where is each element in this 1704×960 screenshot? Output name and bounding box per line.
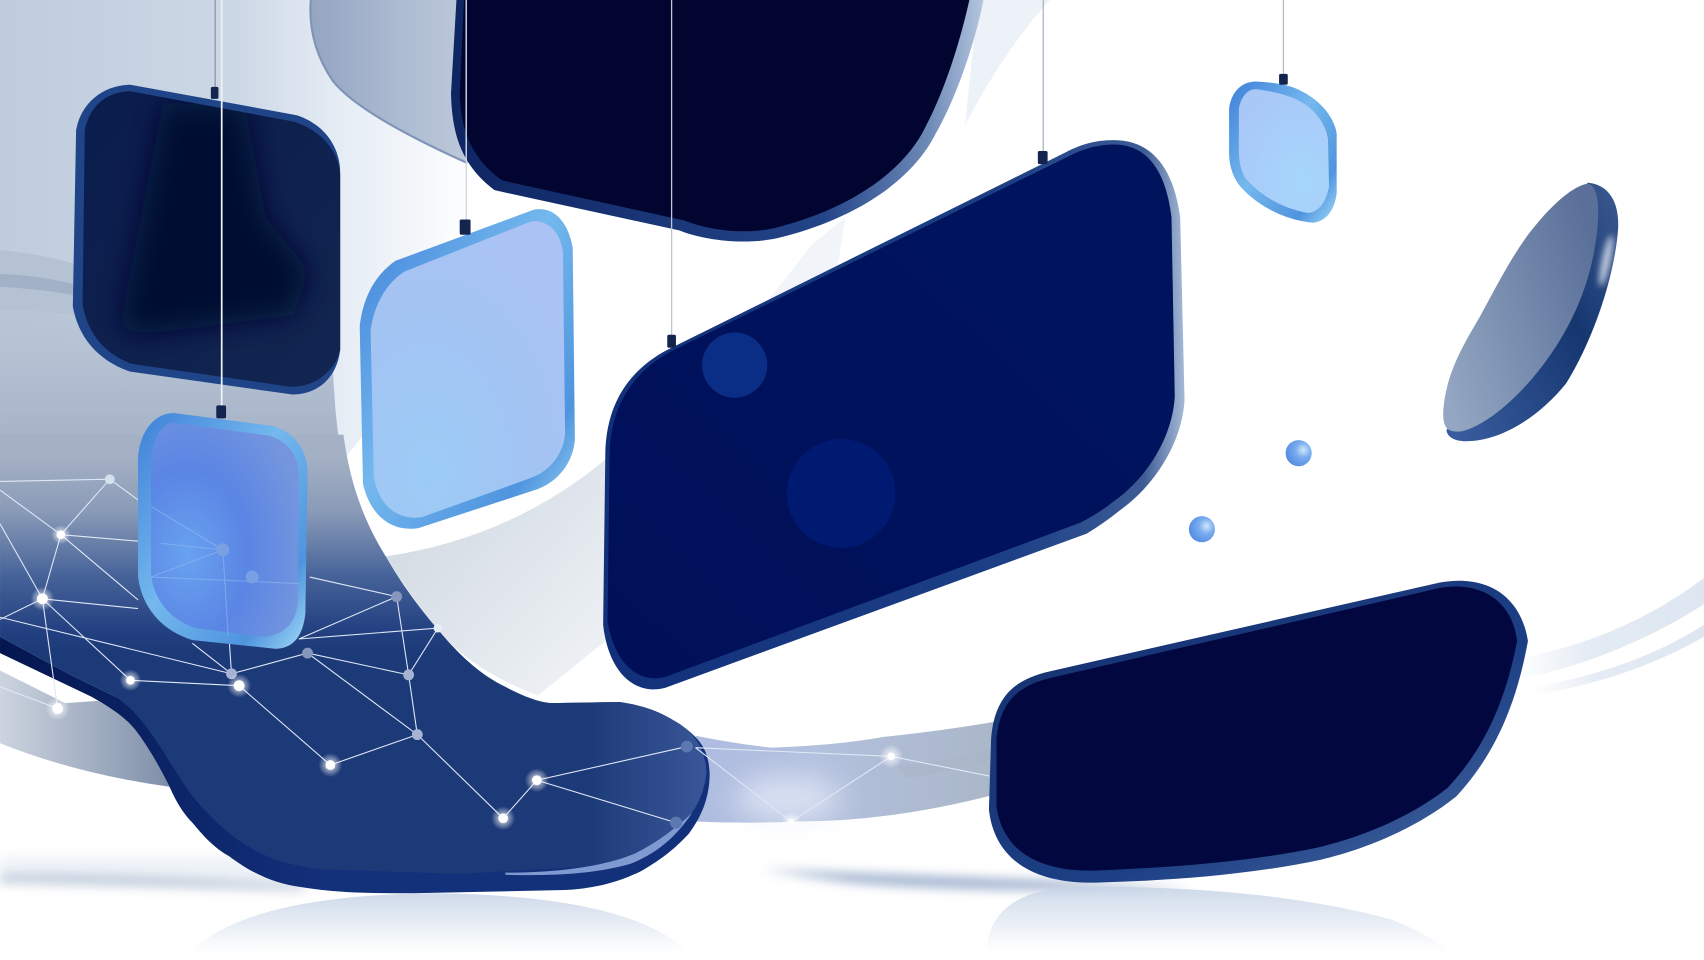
background swoosh: left gradient — [0, 0, 478, 543]
network nodes: glowing — [30, 525, 903, 831]
panel: dark lower right — [989, 581, 1528, 883]
floor reflection: right — [987, 887, 1462, 960]
panel: dark upper left — [73, 85, 340, 394]
lower band: left under ribbon — [0, 671, 170, 787]
swoosh outer edge — [0, 637, 710, 893]
background band: mid arc — [386, 460, 605, 695]
floor shadows — [0, 856, 1195, 891]
swoosh face — [0, 435, 706, 874]
network lines — [0, 479, 989, 823]
lower band: ribbon between shapes — [696, 722, 995, 823]
panel reflection shadow — [120, 103, 310, 335]
background band: faint right swoosh — [1516, 578, 1704, 695]
floor reflection: left — [185, 893, 696, 960]
panel: small glass top right — [1229, 82, 1337, 223]
swoosh highlight — [505, 813, 692, 875]
background band: left strip — [0, 250, 76, 315]
panel: large navy — [603, 140, 1185, 689]
background band: top right sliver — [761, 0, 1050, 310]
panel: light glass centre — [360, 209, 575, 529]
lens flare: small — [702, 333, 767, 398]
lens flare: large — [787, 439, 895, 548]
panel: blue glass lower left — [138, 413, 308, 649]
hanging wires — [215, 0, 1283, 409]
wire connectors — [211, 74, 1288, 418]
panel: navy swoosh base — [0, 435, 710, 893]
background band: top lens — [310, 0, 467, 163]
network nodes: dim — [105, 474, 693, 829]
disc: tilted right — [1443, 183, 1618, 441]
spheres — [1189, 440, 1312, 542]
panel: top large dark — [451, 0, 983, 242]
faint network through glass — [151, 506, 299, 636]
